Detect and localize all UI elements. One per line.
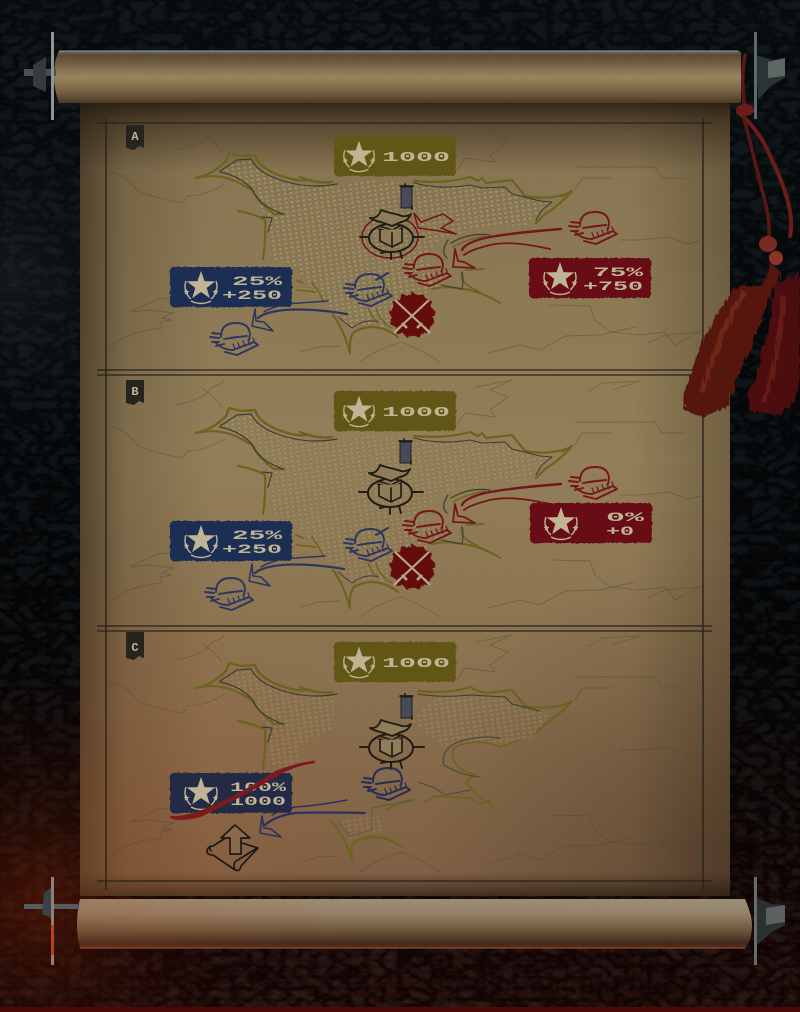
red fleet attack arrow B [453, 484, 561, 523]
red points badge B: +0 [606, 524, 634, 539]
panel C: blue retreats, reward cancelled [108, 632, 705, 872]
total points badge C: 1000 [382, 656, 450, 672]
red helmet near A [403, 254, 451, 286]
blue retreat arrow A [252, 301, 347, 331]
hatched land bottom C [340, 812, 385, 840]
frame lines dividing the three panels [97, 118, 712, 890]
blue helmet distant B [205, 578, 253, 610]
crossed swords battle seal B [389, 544, 436, 590]
coastline bottom B [296, 535, 398, 608]
red helmet near B [403, 511, 451, 543]
hatched land right C [410, 696, 552, 748]
red points badge B: 0% [606, 510, 644, 525]
total points badge B [334, 391, 456, 431]
top scroll roller [54, 51, 741, 103]
hatched territory A [222, 159, 552, 328]
total points badge B: 1000 [382, 405, 450, 421]
blue points badge A: 25% [232, 274, 282, 289]
fortress C [360, 694, 424, 769]
hatched land left C [222, 669, 335, 770]
blue points badge C: 100% [230, 780, 286, 795]
bay coastline C [418, 737, 520, 812]
blue points badge C [170, 773, 292, 813]
blue helmet near A [344, 274, 392, 306]
coastline bottom A [296, 280, 398, 353]
red points badge B [530, 503, 652, 543]
blue points badge C: 1000 [230, 794, 286, 809]
coastline right A [414, 177, 572, 303]
panel letter tag C: C [131, 641, 139, 655]
panel B: fortress holds, red gets nothing [108, 380, 705, 617]
metal rod end top left [24, 32, 56, 120]
red helmet distant A [569, 212, 617, 244]
background cloud contours C [108, 635, 705, 872]
background cloud contours B [108, 380, 705, 617]
crossed swords battle seal A [389, 292, 436, 338]
red helmet distant B [569, 467, 617, 499]
blue points badge A: +250 [222, 288, 282, 303]
total points badge A: 1000 [382, 150, 450, 166]
red tassels [684, 264, 800, 417]
panel letter tag A: A [131, 130, 139, 144]
metal rod end bottom right [754, 877, 785, 965]
panel letter tag C [126, 632, 144, 660]
blue points badge B [170, 521, 292, 561]
parchment scroll sheet [80, 100, 730, 896]
blue helmet handle B [376, 528, 388, 535]
total points badge C [334, 642, 456, 682]
coastline left C [196, 663, 337, 769]
red points badge A: +750 [583, 279, 643, 294]
blue retreat arrow C [260, 800, 365, 837]
metal rod end top right [754, 32, 785, 119]
coastline bottom C [330, 800, 413, 860]
panel letter tag A [126, 125, 144, 150]
hatched territory B [222, 414, 552, 583]
coastline right B [414, 432, 572, 558]
fortress B [359, 439, 423, 514]
panel A: both fleets attack [108, 125, 705, 362]
blue points badge A [170, 267, 292, 307]
blue points badge B: 25% [232, 528, 282, 543]
blue retreat arrow B [249, 556, 344, 586]
coastline left B [196, 408, 337, 514]
blue helmet near B [344, 529, 392, 561]
bottom scroll roller [76, 899, 752, 948]
red strike-through brush stroke [171, 762, 314, 819]
red tassel cords [736, 55, 791, 265]
coastline left A [196, 153, 337, 259]
coastline top right C [418, 687, 572, 733]
background cloud contours A [108, 125, 705, 362]
scroll with up arrow icon [207, 825, 258, 870]
red points badge A [529, 258, 651, 298]
panel letter tag B: B [131, 385, 139, 399]
blue points badge B: +250 [222, 542, 282, 557]
blue helmet distant A [210, 323, 258, 355]
fortress under siege [360, 184, 424, 259]
panel letter tag B [126, 380, 144, 405]
total points badge A [334, 136, 456, 176]
red points badge A: 75% [593, 265, 643, 280]
metal rod end bottom left [24, 877, 78, 965]
red fleet attack arrow A [453, 229, 561, 268]
blue helmet at fortress C [362, 768, 410, 800]
red conquest flag arrow [414, 213, 456, 234]
blue helmet handle A [376, 273, 388, 280]
